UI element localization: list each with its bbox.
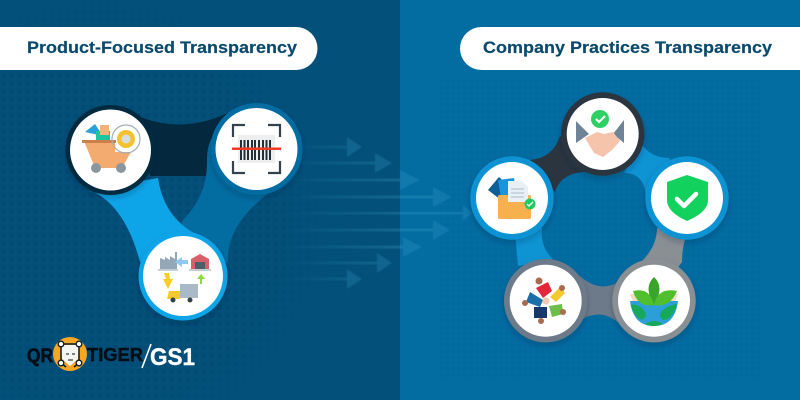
title pill: Product-Focused Transparency (0, 27, 317, 70)
diagram: product-focused connected nodes (66, 103, 302, 320)
panel: left background (0, 0, 400, 400)
icon: plant and earth (630, 277, 678, 326)
logo: QR TIGER / GS1: TIGER (87, 345, 143, 365)
icon: folder with documents (488, 177, 536, 219)
logo: QR TIGER / GS1: QR (27, 346, 53, 367)
connector: light blue link cart to supply chain (90, 178, 210, 262)
connector: dark link cart to scanner (136, 113, 228, 176)
node: documents (470, 156, 554, 240)
icon: group of people (522, 278, 566, 324)
connector: slate link plant to people (578, 276, 620, 324)
diagram: company practices connected nodes (470, 92, 729, 342)
node: planet plant (612, 259, 696, 342)
node: shield (645, 156, 729, 240)
title pill: Company Practices Transparency: Company Practices Transparency (483, 39, 773, 57)
node: community (504, 259, 587, 342)
connector: blue link scanner to supply chain (170, 130, 270, 262)
icon: supply chain cycle (158, 252, 211, 302)
arrows: flow from left to right (280, 137, 472, 289)
node: handshake (561, 92, 644, 176)
connector: dark link folder to handshake (530, 136, 592, 192)
icon: handshake with check (576, 110, 624, 157)
title pill: Company Practices Transparency (460, 27, 800, 70)
connector: grey link shield to plant (640, 228, 686, 285)
title pill: Product-Focused Transparency: Product-Focused Transparency (27, 39, 298, 57)
icon: tiger face (58, 341, 82, 367)
node: cart (66, 105, 156, 195)
node: supply chain (138, 232, 228, 320)
logo: QR TIGER / GS1 (27, 337, 195, 371)
connector: blue link handshake to shield (624, 143, 670, 200)
node: scanner (210, 103, 302, 195)
connector: blue link people to folder (515, 228, 553, 266)
panel: right background (400, 0, 800, 400)
logo: QR TIGER / GS1: GS1 (150, 344, 195, 371)
icon: barcode scanner (232, 125, 281, 173)
icon: green shield check (667, 175, 708, 221)
icon: shopping cart with gear (82, 124, 140, 173)
